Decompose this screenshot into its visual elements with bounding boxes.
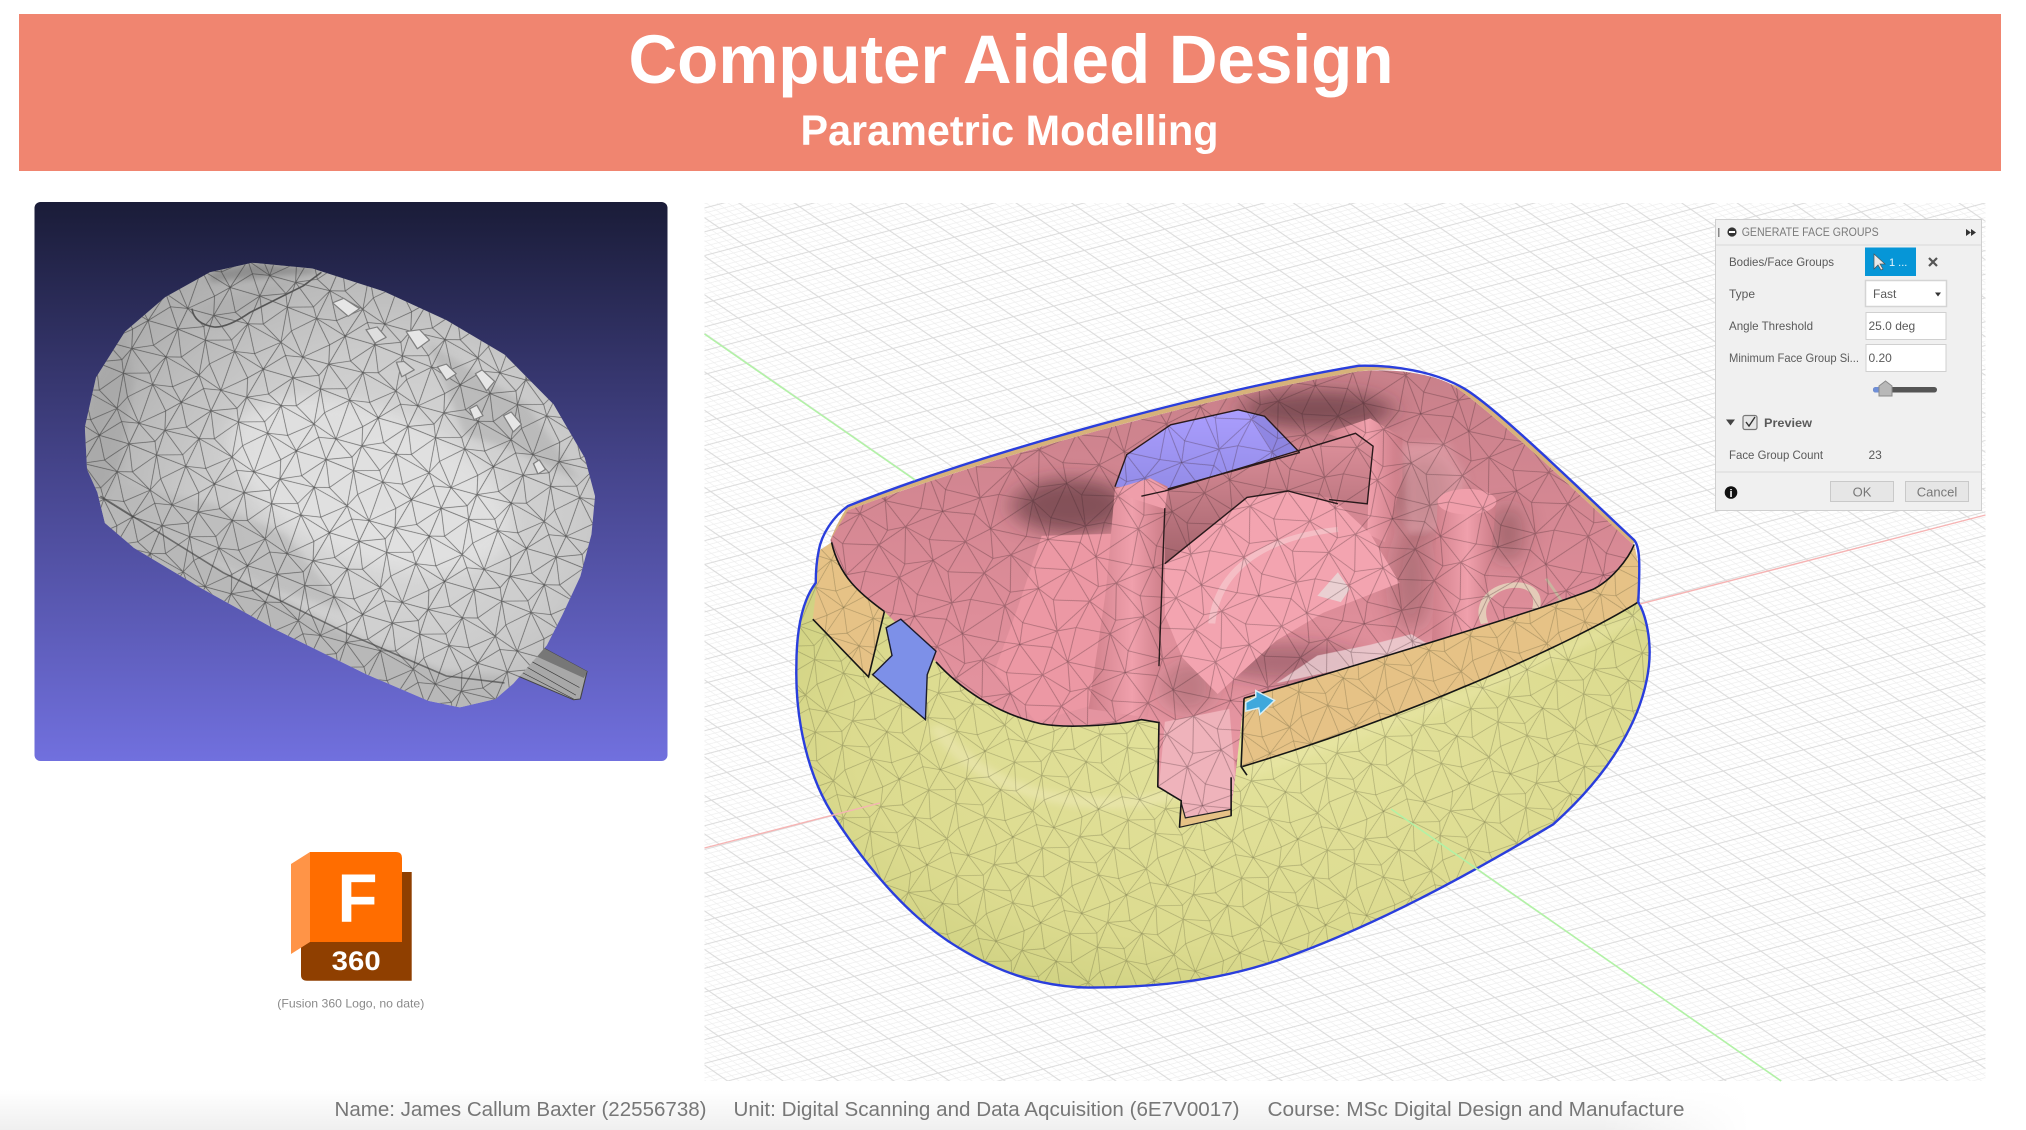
row: face group count: 23 <box>1868 448 1882 462</box>
row: minimum size: 0.20 <box>1868 351 1892 365</box>
title: Computer Aided Design <box>628 21 1394 98</box>
blue silhouette outline <box>796 366 1650 988</box>
dialog header <box>1718 227 1976 239</box>
left block <box>995 534 1112 722</box>
axis: green lower <box>1391 809 1781 1081</box>
purple dome <box>1115 410 1300 489</box>
row: bodies: Bodies/Face Groups <box>1729 255 1834 269</box>
dialog: Generate Face Groups <box>1716 220 1982 510</box>
shell: green lower body <box>783 564 1664 995</box>
ring <box>1482 585 1537 623</box>
interior creases <box>1115 410 1373 666</box>
OK button: OK <box>1853 484 1872 500</box>
row: minimum size <box>1729 344 1946 372</box>
floor highlights <box>1276 634 1429 683</box>
row: type: Fast <box>1873 287 1897 301</box>
left post <box>1089 478 1168 717</box>
icon: Fusion 360 logo: 360 <box>332 946 381 976</box>
row: angle threshold <box>1729 312 1946 340</box>
axis: red left <box>704 803 880 848</box>
header banner <box>19 14 2001 171</box>
shell: pink interior <box>819 363 1652 824</box>
row: face group count: Face Group Count <box>1729 448 1824 462</box>
row: face group count <box>1729 448 1882 462</box>
preview checkbox: Preview <box>1764 416 1813 430</box>
preview checkbox <box>1726 416 1813 430</box>
icon: Fusion 360 logo <box>291 852 412 981</box>
info icon <box>1725 486 1737 500</box>
Cancel button <box>1906 482 1968 502</box>
panel: MeshLab mouse mesh render <box>34 202 668 761</box>
footer: name: Name: James Callum Baxter (22556738) <box>334 1099 706 1121</box>
dialog header: GENERATE FACE GROUPS <box>1742 227 1879 239</box>
row: type <box>1729 280 1946 306</box>
row: angle threshold: Angle Threshold <box>1729 319 1813 333</box>
rear wall plate <box>1164 436 1372 563</box>
panel: Fusion 360 face groups viewport <box>704 203 1986 1081</box>
row: angle threshold: 25.0 deg <box>1868 319 1915 333</box>
row: bodies: 1 ... <box>1889 257 1907 269</box>
row: type: Type <box>1729 287 1755 301</box>
icon: Fusion 360 logo: F <box>338 860 378 937</box>
footer: course: Course: MSc Digital Design and Manufacture <box>1268 1099 1684 1121</box>
row: minimum size: Minimum Face Group Si... <box>1729 351 1859 365</box>
shell: orange rim band <box>807 534 1646 773</box>
subtitle: Parametric Modelling <box>800 107 1218 155</box>
footer credits <box>334 1099 1684 1121</box>
info icon: i <box>1729 488 1733 500</box>
OK button <box>1830 482 1894 502</box>
axis: green upper <box>704 334 915 480</box>
inner wall shadows <box>1012 391 1523 713</box>
axis: red right <box>1640 515 1986 604</box>
hump <box>1165 491 1400 694</box>
mouse cable stub <box>513 647 587 700</box>
Cancel button: Cancel <box>1917 484 1957 500</box>
viewport grid <box>704 203 1986 1081</box>
notch lip <box>1179 803 1231 827</box>
footer: unit: Unit: Digital Scanning and Data Aqcuisition (6E7V0017) <box>734 1099 1240 1121</box>
small column <box>1432 504 1495 641</box>
seam creases <box>813 542 1638 827</box>
mouse body mesh <box>84 262 595 708</box>
rim top strip <box>830 366 1417 540</box>
blue clip <box>873 619 936 720</box>
logo caption: (Fusion 360 Logo, no date) <box>277 996 424 1010</box>
right rear post <box>1326 418 1402 542</box>
row: bodies <box>1729 248 1937 276</box>
mouse button holes <box>333 298 546 474</box>
slider <box>1873 381 1937 396</box>
cyan arrow <box>1246 691 1275 714</box>
